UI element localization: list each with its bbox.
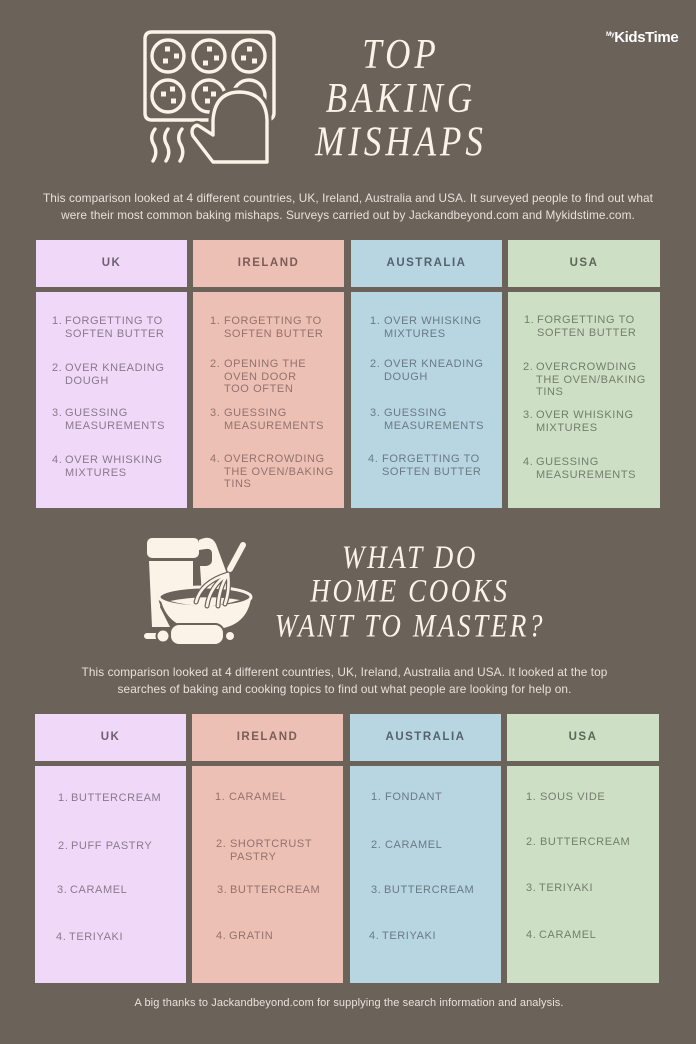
panel: searches Australia list: 4. bbox=[369, 930, 379, 942]
panel: searches Australia list: FONDANT bbox=[385, 791, 442, 803]
panel: searches Ireland list: 3. bbox=[217, 884, 227, 896]
panel: searches Australia list: BUTTERCREAM bbox=[384, 884, 474, 896]
panel: mishaps Australia list: MIXTURES bbox=[384, 328, 446, 340]
panel: searches UK list: BUTTERCREAM bbox=[71, 792, 161, 804]
icon: muffin tray and oven mitt bbox=[143, 30, 276, 164]
panel: mishaps USA list: OVER WHISKING bbox=[536, 409, 634, 421]
panel: mishaps UK list: 3. bbox=[52, 407, 62, 419]
panel: mishaps Ireland list: OVEN DOOR bbox=[224, 370, 297, 382]
panel: searches Ireland list: GRATIN bbox=[229, 930, 273, 942]
panel: searches USA header bbox=[507, 714, 659, 761]
panel: searches Australia header bbox=[350, 714, 501, 761]
panel: mishaps Australia header: AUSTRALIA bbox=[387, 257, 466, 269]
panel: searches Australia list: 3. bbox=[371, 884, 381, 896]
panel: searches Australia list: 1. bbox=[371, 791, 381, 803]
panel: mishaps USA header bbox=[508, 240, 660, 287]
logo: MyKidsTime: MyKidsTime bbox=[606, 29, 678, 46]
panel: mishaps USA list: SOFTEN BUTTER bbox=[537, 326, 636, 338]
panel: mishaps Ireland list: SOFTEN BUTTER bbox=[224, 328, 323, 340]
panel: mishaps Australia list: 1. bbox=[370, 315, 380, 327]
title: top baking mishaps bbox=[314, 31, 487, 165]
panel: searches USA header: USA bbox=[569, 731, 597, 743]
panel: searches USA list: 3. bbox=[526, 882, 536, 894]
panel: mishaps USA list: TINS bbox=[536, 386, 563, 398]
panel: mishaps UK list: GUESSING bbox=[65, 407, 128, 419]
panel: mishaps Ireland list: THE OVEN/BAKING bbox=[224, 466, 334, 478]
panel: mishaps UK list: 1. bbox=[52, 315, 62, 327]
panel: searches Ireland list: PASTRY bbox=[230, 850, 277, 862]
panel: mishaps UK list: DOUGH bbox=[65, 374, 109, 386]
panel: mishaps USA list: 2. bbox=[523, 361, 533, 373]
panel: searches UK list: CARAMEL bbox=[70, 884, 127, 896]
panel: searches Ireland list: CARAMEL bbox=[229, 791, 286, 803]
panel: mishaps USA list: 4. bbox=[523, 456, 533, 468]
panel: mishaps Australia list: MEASUREMENTS bbox=[384, 420, 484, 432]
panel: mishaps Ireland list: OPENING THE bbox=[224, 358, 306, 370]
panel: mishaps Australia list: OVER WHISKING bbox=[384, 315, 482, 327]
panel: searches Australia header: AUSTRALIA bbox=[386, 731, 465, 743]
panel: searches UK list: PUFF PASTRY bbox=[71, 840, 152, 852]
panel: mishaps UK list: OVER WHISKING bbox=[65, 454, 163, 466]
panel: searches USA list: CARAMEL bbox=[539, 929, 596, 941]
panel: mishaps Ireland list: 4. bbox=[210, 453, 220, 465]
panel: mishaps UK header: UK bbox=[102, 257, 121, 269]
panel: searches UK list: TERIYAKI bbox=[69, 931, 123, 943]
panel: searches USA list: 1. bbox=[526, 791, 536, 803]
title: what do home cooks want to master: HOME COOKS bbox=[310, 573, 510, 609]
panel: searches Australia list: TERIYAKI bbox=[382, 930, 436, 942]
title: top baking mishaps: BAKING bbox=[326, 75, 476, 121]
panel: searches UK list: 2. bbox=[58, 840, 68, 852]
panel: mishaps Ireland list: TINS bbox=[224, 478, 251, 490]
panel: searches USA list: 2. bbox=[526, 836, 536, 848]
panel: mishaps USA list: 3. bbox=[523, 409, 533, 421]
panel: mishaps Australia list: 4. bbox=[368, 453, 378, 465]
panel: mishaps UK list: 2. bbox=[52, 362, 62, 374]
panel: mishaps Australia list: 2. bbox=[370, 358, 380, 370]
panel: mishaps Australia list: OVER KNEADING bbox=[384, 358, 484, 370]
title: what do home cooks want to master: WHAT DO bbox=[342, 539, 478, 575]
intro text: home cooks bbox=[82, 665, 607, 696]
panel: mishaps Ireland list bbox=[193, 292, 344, 508]
panel: mishaps USA list: MIXTURES bbox=[536, 422, 598, 434]
panel: searches Ireland list: 4. bbox=[216, 930, 226, 942]
panel: searches Australia list bbox=[350, 766, 501, 983]
panel: mishaps Ireland list: 2. bbox=[210, 358, 220, 370]
panel: mishaps USA list: OVERCROWDING bbox=[536, 361, 637, 373]
panel: searches Australia list: 2. bbox=[371, 839, 381, 851]
title: top baking mishaps: MISHAPS bbox=[315, 119, 487, 165]
intro text: baking mishaps bbox=[43, 191, 653, 222]
panel: mishaps Ireland list: GUESSING bbox=[224, 407, 287, 419]
panel: mishaps UK list: OVER KNEADING bbox=[65, 362, 164, 374]
panel: mishaps Ireland list: TOO OFTEN bbox=[224, 383, 293, 395]
panel: searches UK list bbox=[35, 766, 186, 983]
panel: searches Australia list: CARAMEL bbox=[385, 839, 442, 851]
panel: searches Ireland list: 2. bbox=[216, 838, 226, 850]
title: what do home cooks want to master: WANT TO MASTER? bbox=[275, 607, 545, 643]
panel: searches USA list: TERIYAKI bbox=[539, 882, 593, 894]
panel: searches USA list bbox=[507, 766, 659, 983]
panel: mishaps USA list bbox=[508, 292, 660, 508]
panel: mishaps Ireland list: FORGETTING TO bbox=[224, 315, 322, 327]
footer thanks note: A big thanks to Jackandbeyond.com for supplying the search information and analysis. bbox=[134, 997, 564, 1009]
panel: mishaps Australia list: GUESSING bbox=[384, 407, 447, 419]
panel: mishaps UK header bbox=[36, 240, 187, 287]
panel: mishaps UK list: 4. bbox=[52, 454, 62, 466]
intro text: home cooks: This comparison looked at 4 different countries, UK, Ireland, Australia and USA. It looked at the top bbox=[82, 665, 607, 679]
panel: searches UK header bbox=[35, 714, 186, 761]
panel: mishaps Ireland header bbox=[193, 240, 344, 287]
panel: mishaps Australia header bbox=[351, 240, 502, 287]
intro text: baking mishaps: This comparison looked at 4 different countries, UK, Ireland, Australia and USA. It surveyed people to find out what bbox=[43, 191, 653, 205]
title: what do home cooks want to master bbox=[275, 539, 545, 643]
panel: searches UK list: 3. bbox=[57, 884, 67, 896]
panel: searches UK list: 4. bbox=[56, 931, 66, 943]
panel: searches UK header: UK bbox=[101, 731, 120, 743]
panel: mishaps USA list: THE OVEN/BAKING bbox=[536, 374, 646, 386]
panel: mishaps Ireland list: 1. bbox=[210, 315, 220, 327]
panel: searches UK list: 1. bbox=[58, 792, 68, 804]
panel: mishaps USA header: USA bbox=[570, 257, 598, 269]
panel: mishaps Ireland header: IRELAND bbox=[238, 257, 299, 269]
panel: searches USA list: BUTTERCREAM bbox=[540, 836, 630, 848]
panel: mishaps UK list: MIXTURES bbox=[65, 466, 127, 478]
panel: mishaps UK list bbox=[36, 292, 187, 508]
panel: mishaps Australia list: FORGETTING TO bbox=[382, 453, 480, 465]
panel: mishaps USA list: MEASUREMENTS bbox=[536, 468, 636, 480]
panel: mishaps USA list: 1. bbox=[524, 314, 534, 326]
panel: mishaps Australia list bbox=[351, 292, 502, 508]
panel: searches USA list: SOUS VIDE bbox=[540, 791, 605, 803]
panel: mishaps USA list: FORGETTING TO bbox=[537, 314, 635, 326]
title: top baking mishaps: TOP bbox=[362, 31, 440, 77]
panel: searches Ireland header bbox=[192, 714, 343, 761]
panel: mishaps UK list: SOFTEN BUTTER bbox=[65, 328, 164, 340]
panel: mishaps UK list: FORGETTING TO bbox=[65, 315, 163, 327]
panel: mishaps Ireland list: OVERCROWDING bbox=[224, 453, 325, 465]
panel: searches Ireland list bbox=[192, 766, 343, 983]
panel: searches Ireland header: IRELAND bbox=[237, 731, 298, 743]
icon: mixing bowl, whisk, recipe scroll and rolling pin bbox=[144, 538, 252, 644]
panel: mishaps UK list: MEASUREMENTS bbox=[65, 420, 165, 432]
panel: mishaps USA list: GUESSING bbox=[536, 456, 599, 468]
panel: searches Ireland list: SHORTCRUST bbox=[230, 838, 312, 850]
panel: mishaps Ireland list: 3. bbox=[210, 407, 220, 419]
intro text: baking mishaps: were their most common baking mishaps. Surveys carried out by Jackandbeyond.com and Mykidstime.com. bbox=[61, 208, 635, 222]
panel: mishaps Ireland list: MEASUREMENTS bbox=[224, 420, 324, 432]
panel: mishaps Australia list: DOUGH bbox=[384, 370, 428, 382]
panel: searches Ireland list: 1. bbox=[215, 791, 225, 803]
panel: searches Ireland list: BUTTERCREAM bbox=[230, 884, 320, 896]
intro text: home cooks: searches of baking and cooking topics to find out what people are looking for help on. bbox=[118, 682, 571, 696]
panel: mishaps Australia list: SOFTEN BUTTER bbox=[382, 466, 481, 478]
panel: mishaps Australia list: 3. bbox=[370, 407, 380, 419]
panel: searches USA list: 4. bbox=[526, 929, 536, 941]
